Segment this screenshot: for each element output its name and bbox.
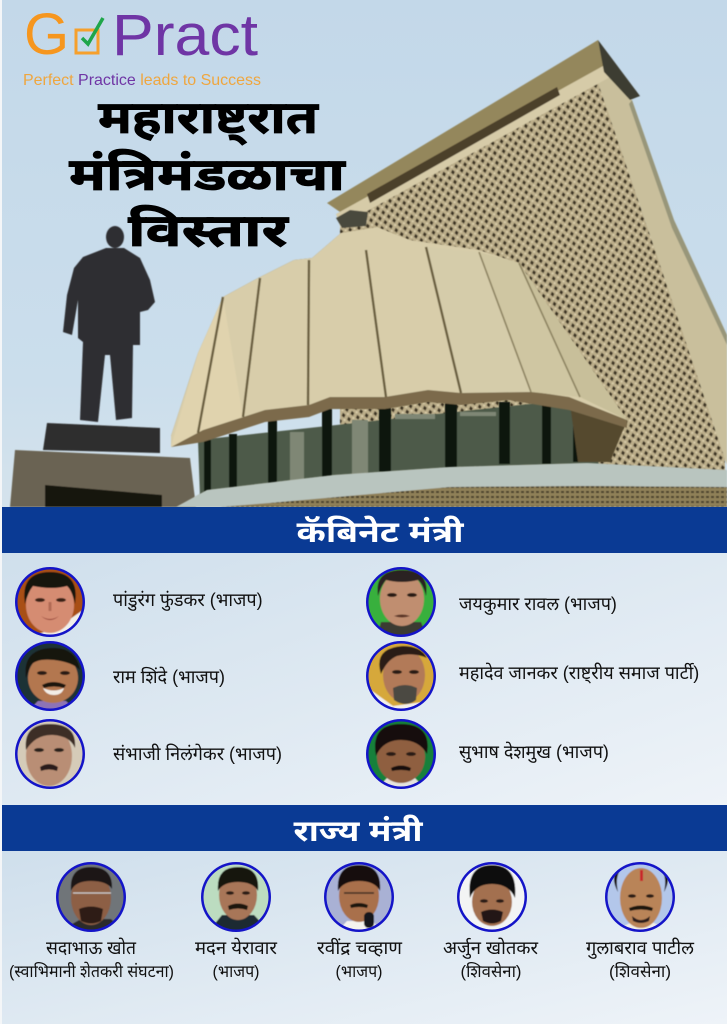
cabinet panel background [2, 553, 727, 805]
name: संभाजी निलंगेकर (भाजप) [113, 743, 282, 764]
minister: Ram Shinde [15, 641, 225, 711]
title: महाराष्ट्रात [98, 91, 320, 145]
sky panel [2, 0, 727, 510]
name: सदाभाऊ खोत [46, 938, 137, 958]
portrait [15, 719, 85, 789]
portrait [366, 567, 436, 637]
party: (शिवसेना) [460, 960, 522, 981]
statue on pedestal [10, 226, 196, 507]
heading band: state ministers: राज्य मंत्री [294, 814, 424, 848]
portrait [605, 862, 675, 932]
logo wordmark [24, 2, 258, 68]
portrait [56, 862, 126, 932]
tower building [327, 40, 727, 480]
name: गुलाबराव पाटील [586, 938, 694, 960]
party: (भाजप) [336, 962, 382, 981]
logo [23, 2, 261, 89]
title: मंत्रिमंडळाचा [69, 148, 347, 200]
minister: Mahadev Jankar [366, 641, 699, 711]
state minister: Sadabhau Khot [9, 862, 174, 981]
portrait [15, 567, 85, 637]
name: जयकुमार रावल (भाजप) [459, 594, 617, 616]
portrait [15, 641, 85, 711]
portrait [201, 862, 271, 932]
state minister: Ravindra Chavan [317, 862, 403, 981]
name: महादेव जानकर (राष्ट्रीय समाज पार्टी) [459, 662, 699, 684]
name: रवींद्र चव्हाण [317, 937, 403, 958]
name: पांडुरंग फुंडकर (भाजप) [113, 590, 263, 612]
portrait [366, 719, 436, 789]
minister: Pandurang Fundkar [15, 567, 263, 637]
logo tagline: Perfect Practice leads to Success [23, 72, 261, 89]
state minister: Madan Yerawar [195, 862, 278, 981]
name: सुभाष देशमुख (भाजप) [459, 741, 609, 764]
portrait [324, 862, 394, 932]
portrait [457, 862, 527, 932]
minister: Subhash Deshmukh [366, 719, 609, 789]
state minister: Arjun Khotkar [443, 862, 539, 981]
name: मदन येरावार [195, 937, 278, 958]
name: राम शिंदे (भाजप) [113, 666, 225, 687]
title [69, 91, 347, 256]
heading band: cabinet ministers: कॅबिनेट मंत्री [296, 514, 465, 549]
heading band: state ministers [2, 805, 727, 851]
logo wordmark: Pract [112, 3, 258, 68]
party: (शिवसेना) [609, 960, 671, 981]
minister: Sambhaji Nilangekar [15, 719, 282, 789]
party: (भाजप) [212, 962, 260, 981]
name: अर्जुन खोतकर [443, 937, 539, 960]
state ministers panel background [2, 851, 727, 1024]
state minister: Gulabrao Patil [586, 862, 694, 981]
party: (स्वाभिमानी शेतकरी संघटना) [9, 960, 174, 981]
dome of the assembly hall [171, 227, 627, 497]
logo wordmark: G [24, 2, 69, 67]
minister: Jaykumar Rawal [366, 567, 617, 637]
portrait [366, 641, 436, 711]
heading band: cabinet ministers [2, 507, 727, 553]
title: विस्तार [128, 204, 289, 256]
curved plaza wall [176, 463, 727, 507]
